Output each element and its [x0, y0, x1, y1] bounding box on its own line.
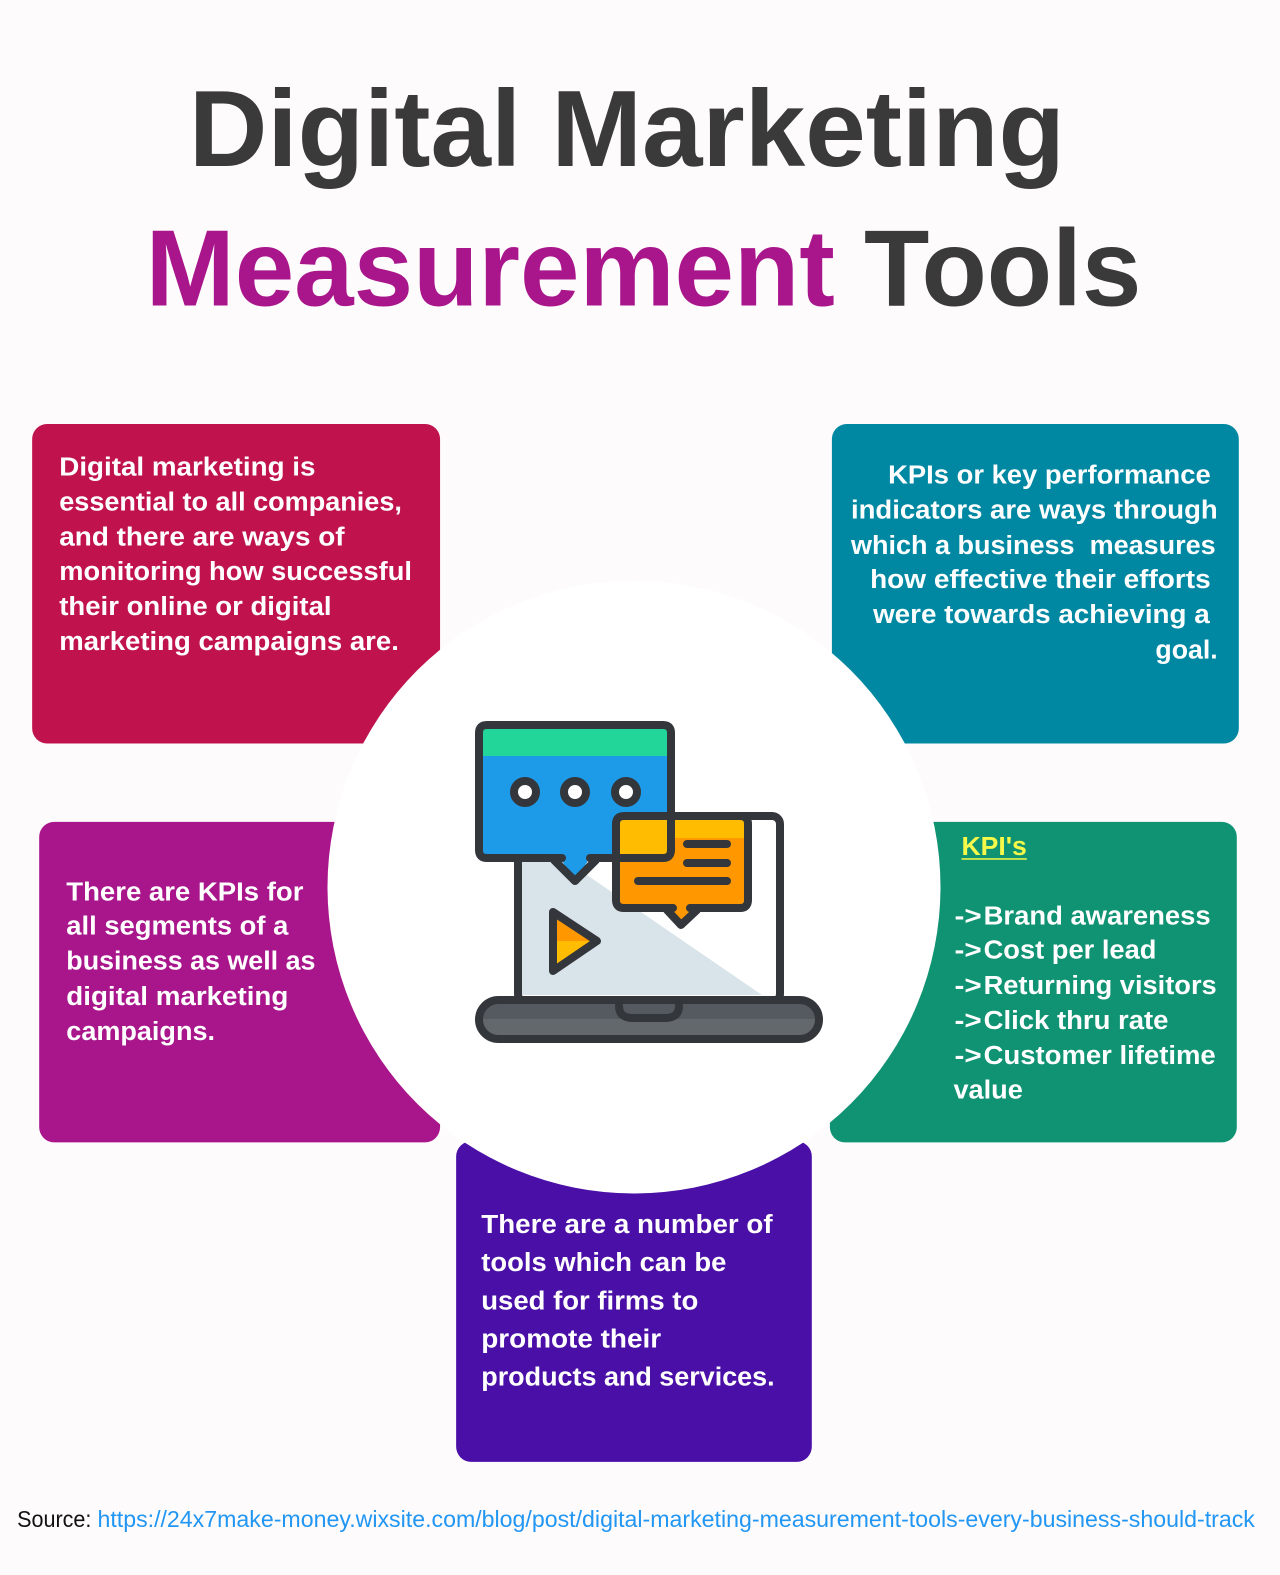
text: digital marketing intro: Digital marketing is: [59, 453, 315, 481]
text: KPI list: [953, 833, 1217, 1104]
text: KPI list: Customer lifetime: [984, 1042, 1216, 1070]
text: tools: promote their: [481, 1326, 661, 1354]
title: Tools: [864, 207, 1141, 328]
text: KPI definition: KPIs or key performance: [888, 461, 1211, 489]
text: tools: There are a number of: [481, 1211, 773, 1239]
text: digital marketing intro: and there are ways of: [59, 524, 345, 552]
source line: https://24x7make-money.wixsite.com/blog/post/digital-marketing-measurement-tools-every-business-should-track: [97, 1506, 1255, 1532]
icon: laptop with chat bubbles: [479, 725, 819, 1039]
text: tools: [481, 1211, 775, 1392]
title: Measurement: [146, 207, 835, 328]
text: KPI list: Cost per lead: [984, 937, 1156, 965]
orange chat bubble: [616, 816, 748, 925]
text: digital marketing intro: their online or digital: [59, 593, 332, 621]
text: KPIs for all segments: digital marketing: [66, 983, 288, 1011]
text: KPI list: value: [953, 1076, 1023, 1104]
panel: tools: [456, 1141, 812, 1462]
text: KPI definition: how effective their efforts: [870, 566, 1211, 594]
text: KPI definition: were towards achieving a: [872, 601, 1210, 629]
text: tools: used for firms to: [481, 1287, 698, 1315]
text: KPIs for all segments: [66, 878, 315, 1046]
panel: KPI list: [830, 822, 1237, 1142]
text: digital marketing intro: marketing campaigns are.: [59, 628, 399, 656]
center white circle: [328, 580, 940, 1194]
text: KPI list: ->: [954, 972, 982, 1000]
panel: digital marketing intro: [32, 424, 440, 743]
blue chat bubble: [479, 725, 671, 880]
text: KPI definition: which a business measures: [850, 532, 1216, 560]
text: KPI list: Brand awareness: [984, 903, 1211, 931]
text: KPI definition: [850, 461, 1218, 664]
text: KPIs for all segments: all segments of a: [66, 913, 289, 941]
text: digital marketing intro: [59, 453, 412, 656]
text: tools: products and services.: [481, 1364, 775, 1392]
panel: KPI definition: [832, 424, 1239, 743]
text: KPI definition: indicators are ways through: [851, 497, 1218, 525]
play button: [553, 912, 597, 971]
text: tools: tools which can be: [481, 1249, 726, 1277]
text: KPI list: ->: [954, 1007, 982, 1035]
text: digital marketing intro: monitoring how successful: [59, 558, 412, 586]
laptop screen: [518, 816, 780, 1002]
title: Digital Marketing: [189, 68, 1065, 189]
text: KPI list: KPI's: [962, 833, 1027, 861]
text: KPIs for all segments: business as well as: [66, 948, 315, 976]
text: KPI list: Click thru rate: [984, 1007, 1168, 1035]
text: KPIs for all segments: campaigns.: [66, 1018, 215, 1046]
text: KPI list: ->: [954, 937, 982, 965]
blue bubble outline: [479, 725, 671, 881]
title: [146, 68, 1141, 328]
text: KPI list: Returning visitors: [984, 972, 1217, 1000]
text: KPI list: ->: [954, 1042, 982, 1070]
text: digital marketing intro: essential to all companies,: [59, 489, 402, 517]
text: KPI definition: goal.: [1155, 636, 1218, 664]
laptop base: [479, 1000, 819, 1039]
panel: KPIs for all segments: [39, 822, 440, 1142]
source line: Source:: [17, 1506, 91, 1532]
text: KPIs for all segments: There are KPIs for: [66, 878, 303, 906]
text: KPI list: ->: [954, 903, 982, 931]
